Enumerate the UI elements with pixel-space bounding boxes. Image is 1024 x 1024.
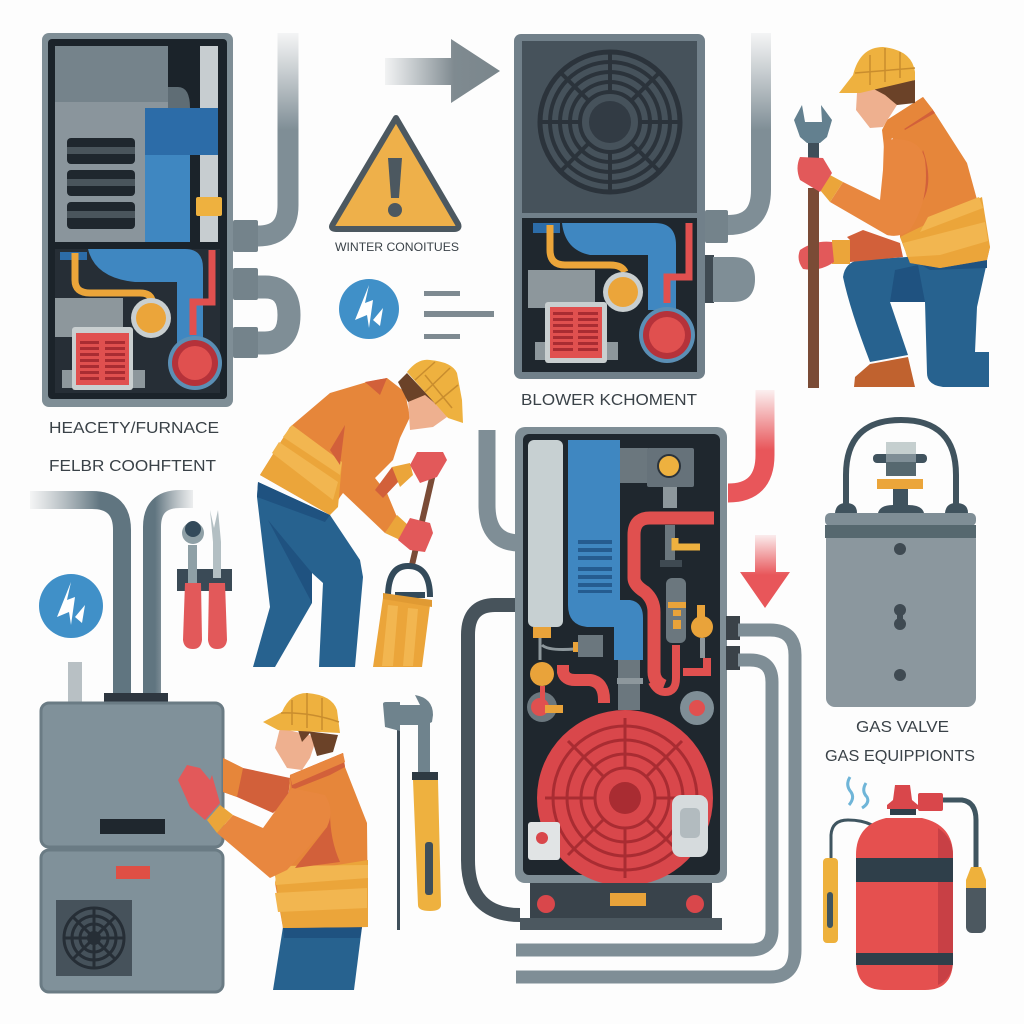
label: gas equipments: GAS EQUIPPIONTS (825, 748, 975, 765)
label: felbr coohftent: FELBR COOHFTENT (49, 458, 216, 475)
furnace unit: lower left (41, 662, 223, 992)
icon: wrench tool (383, 695, 441, 930)
panel: blower compartment unit (514, 34, 755, 379)
pipes: center unit right side (516, 630, 795, 977)
label: blower compartment: BLOWER KCHOMENT (521, 392, 697, 409)
label: gas valve: GAS VALVE (856, 719, 949, 736)
pipes: top-left unit (258, 33, 289, 343)
worker: top right with wrench (794, 47, 990, 388)
arrow: red down (740, 535, 790, 608)
icon: hand tools on rack (177, 510, 232, 649)
pipes: lower left (30, 499, 193, 695)
arrow: top flow (385, 39, 500, 103)
worker: center bending with bucket (253, 360, 463, 667)
pipes: center unit dark return (468, 605, 520, 915)
label: winter conditions: WINTER CONOITUES (335, 240, 459, 254)
icon: electric badge (39, 574, 103, 638)
icon: electric badge with lines (339, 279, 494, 339)
icon: warning triangle (332, 118, 458, 229)
icon: gas cylinder with torch (823, 777, 986, 990)
panel: heating furnace cabinet (42, 33, 258, 407)
pipes: center unit upper-left (487, 430, 520, 543)
panel: central furnace (515, 427, 740, 930)
worker: lower left pressing furnace (178, 693, 368, 990)
pipe: red inlet (728, 390, 765, 493)
icon: gas tank (825, 420, 976, 707)
label: heacety furnace: HEACETY/FURNACE (49, 420, 219, 437)
pipes: top-right unit (728, 33, 761, 225)
